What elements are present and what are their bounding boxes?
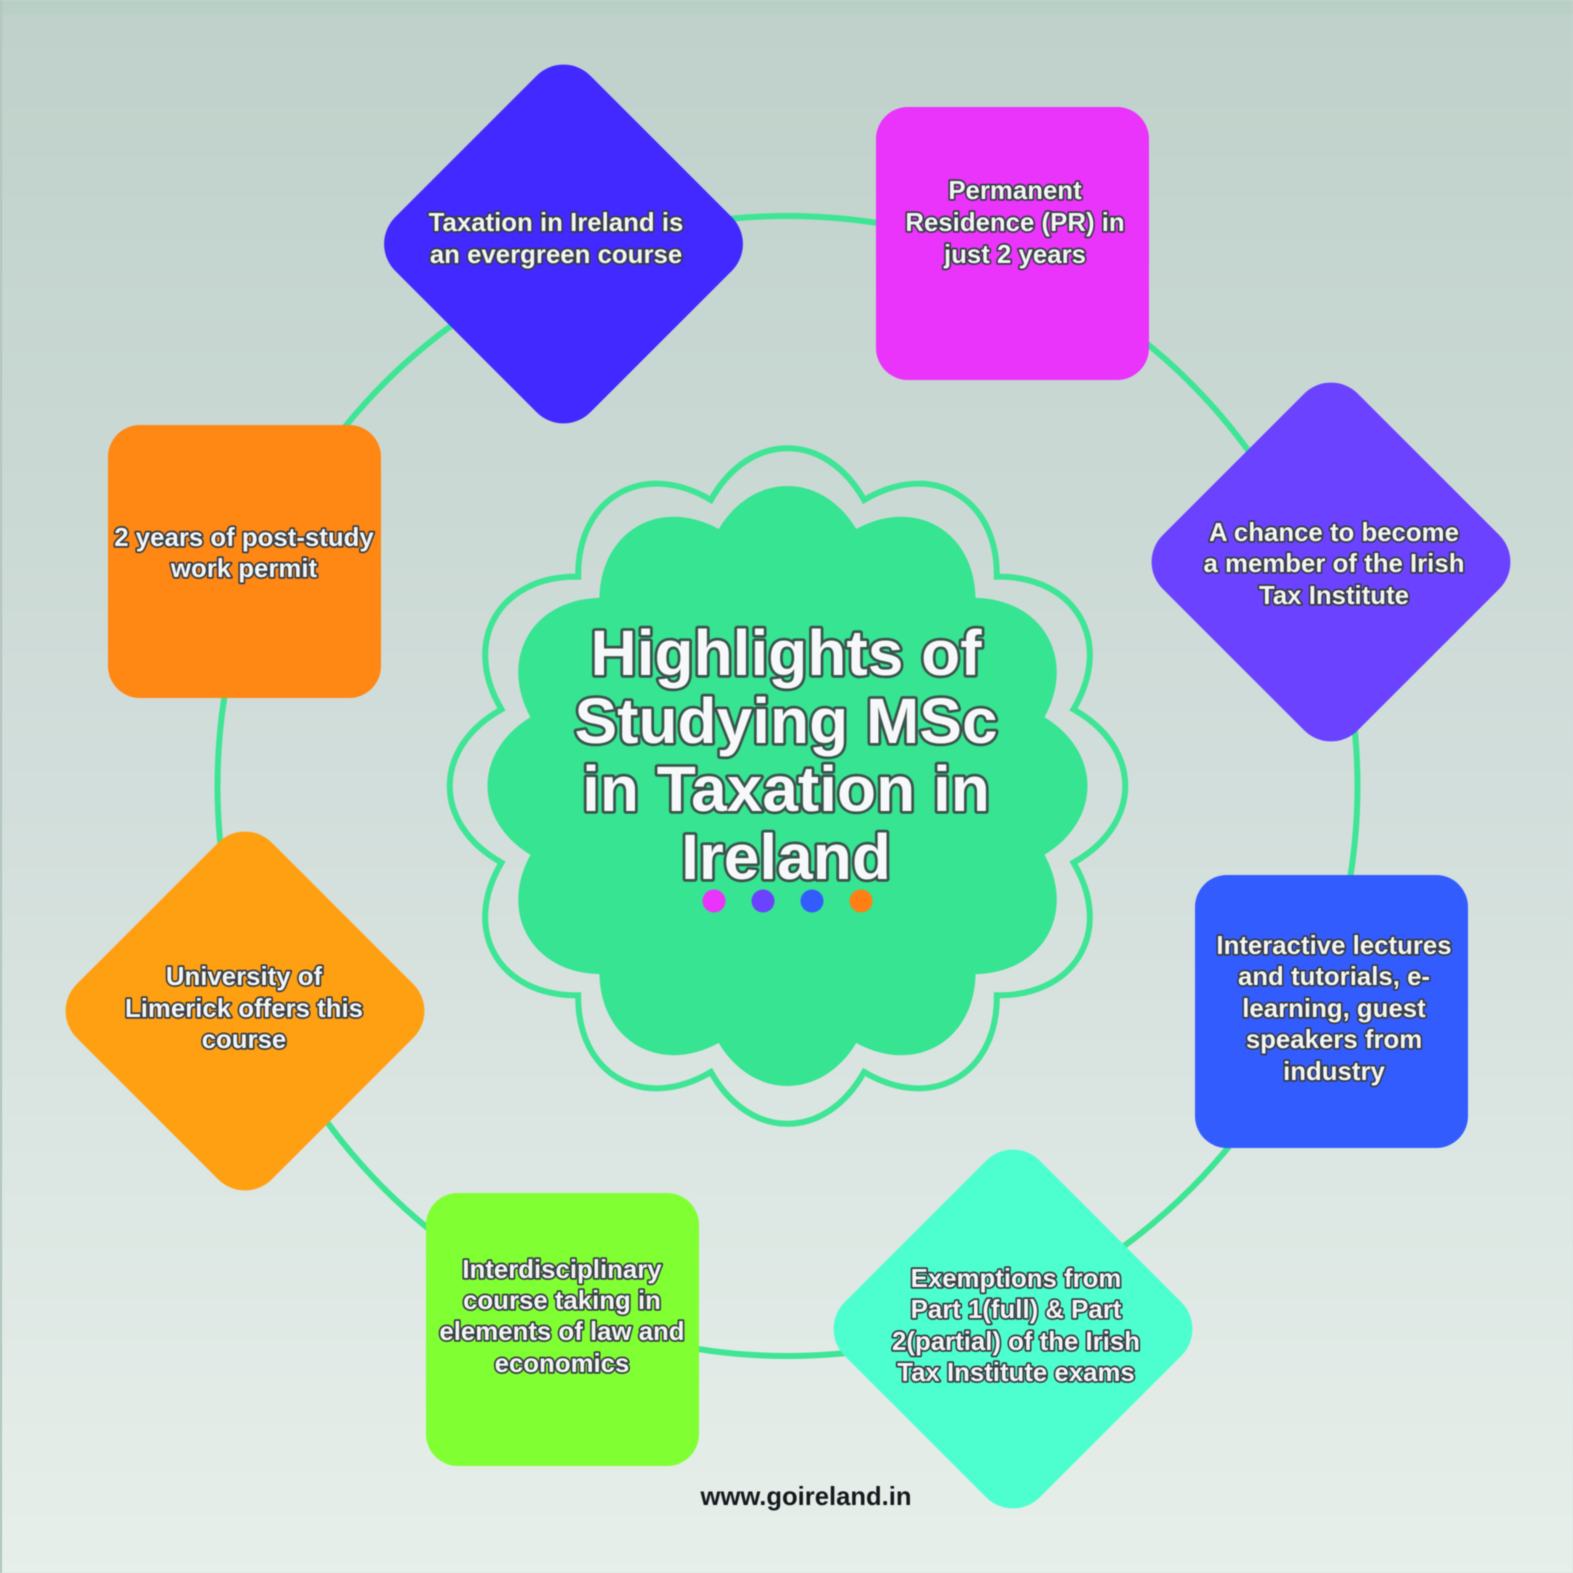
panel: interactive lectures: industry <box>1283 1058 1386 1086</box>
panel: exam exemptions: Part 1(full) & Part <box>911 1296 1122 1324</box>
panel: permanent residence: Permanent <box>948 177 1082 205</box>
decorative coloured dots <box>702 890 872 912</box>
title: Ireland <box>681 821 891 893</box>
panel: post-study work permit: work permit <box>170 555 318 583</box>
panel: interdisciplinary course: elements of law and <box>439 1318 685 1346</box>
ring connecting the highlights <box>218 216 1358 1356</box>
panel: irish tax institute membership: A chance to become <box>1209 519 1459 547</box>
panel: interactive lectures: Interactive lectures <box>1216 932 1452 960</box>
panel: permanent residence: Residence (PR) in <box>905 209 1125 237</box>
panel: evergreen course: Taxation in Ireland is <box>429 209 683 237</box>
panel: evergreen course: an evergreen course <box>430 241 682 269</box>
panel: evergreen course <box>368 49 759 439</box>
panel: exam exemptions: Tax Institute exams <box>897 1359 1135 1387</box>
panel: interdisciplinary course: economics <box>495 1350 629 1378</box>
panel: university of limerick: Limerick offers this <box>125 995 363 1023</box>
central badge <box>450 448 1125 1124</box>
panel: exam exemptions <box>818 1134 1208 1524</box>
panel: irish tax institute membership: a member of the Irish <box>1204 550 1464 578</box>
title: Studying MSc <box>574 685 998 757</box>
panel: exam exemptions: 2(partial) of the Irish <box>892 1328 1140 1356</box>
panel: irish tax institute membership: Tax Institute <box>1259 582 1409 610</box>
panel: interdisciplinary course: Interdisciplinary <box>462 1256 662 1284</box>
badge inner fill <box>488 486 1087 1086</box>
panel: interdisciplinary course: course taking in <box>463 1287 661 1315</box>
title: Highlights of <box>590 617 982 689</box>
badge outer outline <box>450 448 1125 1124</box>
title <box>574 617 998 893</box>
panel: interdisciplinary course <box>426 1193 699 1466</box>
panel: university of limerick: course <box>202 1026 286 1054</box>
panel: post-study work permit: 2 years of post-study <box>114 524 374 552</box>
panel: university of limerick: University of <box>166 963 323 991</box>
panel: interactive lectures: learning, guest <box>1242 995 1426 1023</box>
panel: interactive lectures: speakers from <box>1246 1026 1422 1054</box>
title: in Taxation in <box>582 753 990 825</box>
panel: exam exemptions: Exemptions from <box>911 1265 1121 1293</box>
panel: university of limerick <box>50 816 440 1206</box>
panel: permanent residence: just 2 years <box>943 241 1086 269</box>
panel: interactive lectures <box>1195 875 1468 1148</box>
panel: post-study work permit <box>108 425 381 698</box>
panel: permanent residence <box>876 107 1149 380</box>
website footer: www.goireland.in <box>700 1483 911 1511</box>
panel: interactive lectures: and tutorials, e- <box>1238 963 1430 991</box>
panel: irish tax institute membership <box>1136 367 1526 757</box>
